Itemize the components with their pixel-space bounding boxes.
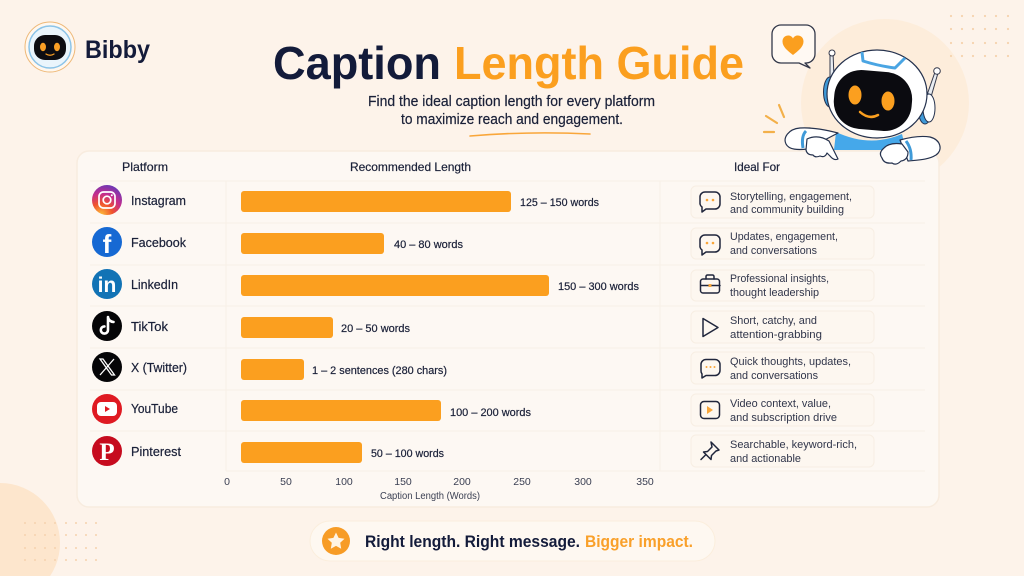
- ideal for: Facebook: Updates, engagement,: [730, 231, 838, 243]
- decorative circle: bottom left: [0, 483, 60, 576]
- ideal for: Facebook: [691, 228, 874, 259]
- row: YouTube: YouTube: [131, 402, 178, 416]
- column headers: Platform: [122, 160, 168, 174]
- title: Caption: [273, 37, 441, 89]
- ideal for: X: and conversations: [730, 370, 818, 382]
- robot eyes: [848, 86, 894, 110]
- panel: chart table: [77, 151, 939, 507]
- ideal for: LinkedIn: [691, 270, 874, 301]
- column headers: Ideal For: [734, 160, 780, 174]
- sparkle lines: [764, 105, 784, 132]
- axis tick labels: 100: [335, 476, 353, 488]
- icon: pin: [701, 442, 719, 460]
- ideal for: Pinterest: [691, 435, 874, 467]
- axis title: Caption Length (Words): [380, 491, 480, 502]
- ideal for: Instagram: and community building: [730, 204, 844, 216]
- subtitle: Find the ideal caption length for every platform: [368, 94, 655, 110]
- icon: TikTok: [92, 311, 122, 341]
- bar: 125–150 words: [241, 191, 511, 212]
- icon: YouTube: [92, 394, 122, 424]
- logo: Bibby: [25, 22, 150, 72]
- robot right arm: [880, 136, 940, 164]
- axis tick labels: 200: [453, 476, 471, 488]
- icon: LinkedIn: in: [98, 274, 116, 297]
- row: Instagram: [92, 185, 874, 218]
- row: Facebook: 40 – 80 words: [394, 239, 463, 251]
- robot right ear: [918, 92, 935, 124]
- row: Pinterest: [92, 435, 874, 467]
- ideal for: X: [691, 352, 874, 384]
- row: YouTube: 100 – 200 words: [450, 407, 531, 419]
- robot head stripe: [862, 52, 905, 68]
- icon: chat bubble: [700, 192, 720, 212]
- tagline text: Bigger impact.: [585, 532, 693, 551]
- axis tick labels: 50: [280, 476, 292, 488]
- bar: 20–50 words: [241, 317, 333, 338]
- icon: chat bubble: [701, 360, 720, 378]
- icon: LinkedIn: [92, 269, 122, 299]
- ideal for: X: Quick thoughts, updates,: [730, 356, 851, 368]
- icon: Pinterest: [92, 436, 122, 466]
- bar: 50–100 words: [241, 442, 362, 463]
- icon: Bibby robot head: [25, 22, 75, 72]
- row: Facebook: Facebook: [131, 236, 187, 250]
- wordmark: Bibby: [85, 36, 150, 64]
- ideal for: TikTok: [691, 311, 874, 343]
- row: X (Twitter): [92, 352, 874, 384]
- ideal for: Instagram: [691, 186, 874, 218]
- icon: Pinterest: P: [99, 439, 115, 466]
- row: TikTok: [92, 311, 874, 343]
- ideal for: YouTube: and subscription drive: [730, 412, 837, 424]
- subtitle: [368, 94, 655, 128]
- row: TikTok: TikTok: [131, 320, 169, 334]
- icon: Instagram: [92, 185, 122, 215]
- row: LinkedIn: [92, 269, 874, 301]
- bar: 100–200 words: [241, 400, 441, 421]
- icon: video: [700, 402, 720, 418]
- axis tick labels: 300: [574, 476, 592, 488]
- tagline text: Right length. Right message.: [365, 532, 580, 551]
- ideal for: LinkedIn: Professional insights,: [730, 273, 829, 285]
- icon: chat bubble: [700, 235, 720, 255]
- ideal for: Facebook: and conversations: [730, 245, 817, 257]
- tagline pill: [310, 521, 715, 561]
- ideal for: Instagram: Storytelling, engagement,: [730, 191, 852, 203]
- row: X (Twitter): X (Twitter): [131, 361, 187, 375]
- axis tick labels: 0: [224, 476, 230, 488]
- robot smile: [860, 112, 878, 117]
- decorative circle: robot backdrop: [801, 19, 969, 187]
- ideal for: Pinterest: Searchable, keyword-rich,: [730, 439, 857, 451]
- axis tick labels: 150: [394, 476, 412, 488]
- row: Pinterest: Pinterest: [131, 445, 182, 459]
- bar: 1–2 sentences: [241, 359, 304, 380]
- robot left arm pointing: [785, 128, 838, 160]
- ideal for: LinkedIn: thought leadership: [730, 287, 819, 299]
- bar: 40–80 words: [241, 233, 384, 254]
- row: Instagram: 125 – 150 words: [520, 197, 599, 209]
- row: LinkedIn: 150 – 300 words: [558, 281, 639, 293]
- dot grid: top right: [950, 15, 1009, 57]
- ideal for: TikTok: Short, catchy, and: [730, 315, 817, 327]
- robot antennas: [829, 50, 940, 97]
- row: TikTok: 20 – 50 words: [341, 323, 410, 335]
- dot grid: bottom left: [24, 522, 97, 561]
- icon: Facebook: [92, 227, 122, 259]
- ideal for: Pinterest: and actionable: [730, 453, 801, 465]
- row: X (Twitter): 1 – 2 sentences (280 chars): [312, 365, 447, 377]
- ideal for: TikTok: attention-grabbing: [730, 329, 822, 341]
- icon: briefcase: [700, 275, 720, 293]
- ideal for: YouTube: [691, 394, 874, 426]
- underline swoosh: [470, 133, 590, 136]
- icon: star: [322, 527, 350, 555]
- speech bubble with heart: [772, 25, 815, 68]
- ideal for: YouTube: Video context, value,: [730, 398, 831, 410]
- row: LinkedIn: LinkedIn: [131, 278, 178, 292]
- axis tick labels: 350: [636, 476, 654, 488]
- robot head: [827, 50, 927, 138]
- icon: play: [703, 318, 718, 336]
- column headers: Recommended Length: [350, 160, 471, 174]
- axis tick labels: [224, 476, 654, 488]
- subtitle: to maximize reach and engagement.: [401, 112, 623, 128]
- robot visor: [832, 68, 914, 133]
- column headers: [122, 160, 780, 174]
- robot body: [834, 132, 906, 150]
- row: Facebook: [92, 227, 874, 259]
- row: Pinterest: 50 – 100 words: [371, 448, 444, 460]
- robot left ear: [824, 77, 836, 107]
- bar: 150–300 words: [241, 275, 549, 296]
- robot mascot: [785, 50, 940, 164]
- icon: X: [92, 352, 122, 382]
- row: Instagram: Instagram: [131, 194, 186, 208]
- row: YouTube: [92, 394, 874, 426]
- axis tick labels: 250: [513, 476, 531, 488]
- icon: Facebook: f: [103, 229, 112, 259]
- title: Length Guide: [454, 37, 744, 89]
